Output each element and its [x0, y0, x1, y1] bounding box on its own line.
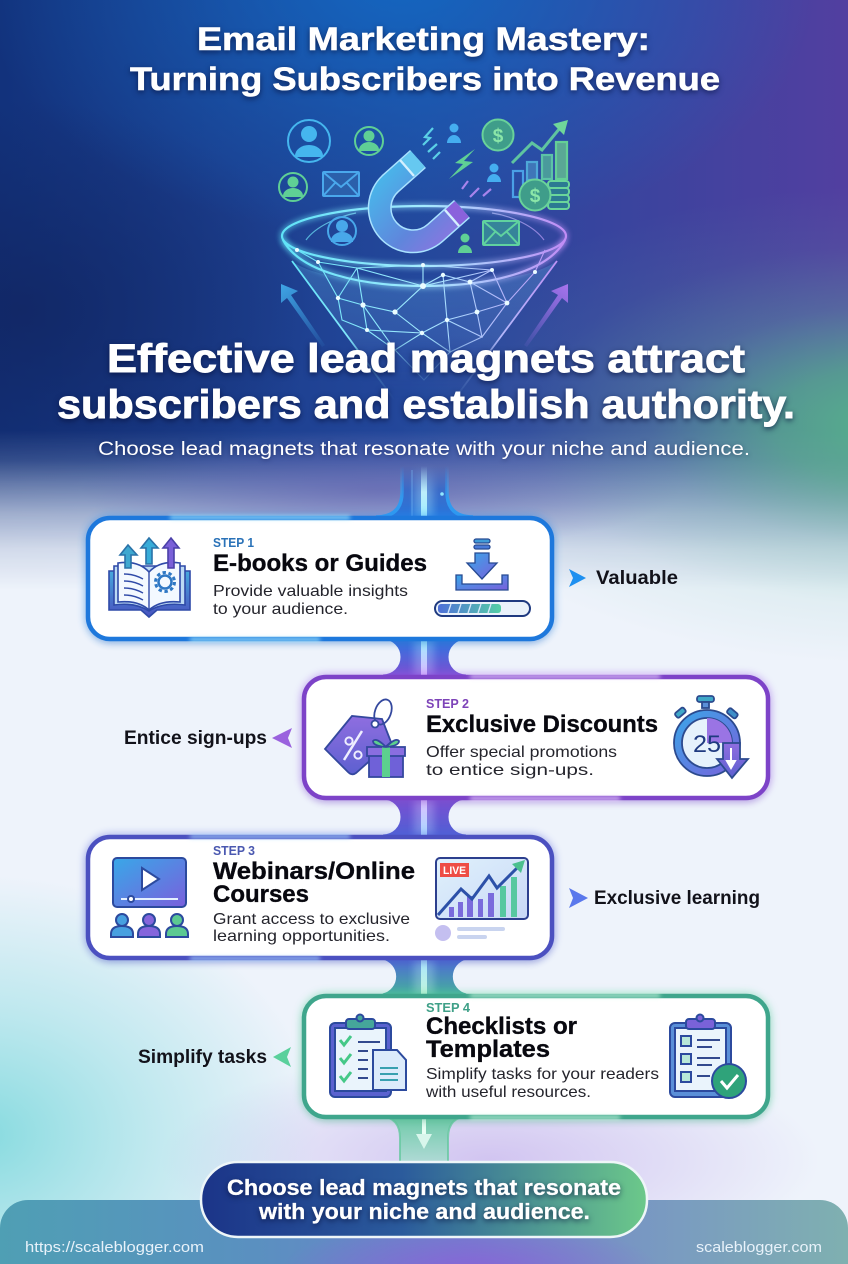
conclusion banner: with your niche and audience.: [258, 1199, 590, 1224]
hero illustration: funnel with magnet and icons: [276, 118, 571, 393]
panel: step 2: [304, 675, 768, 802]
connector to conclusion with arrow: [378, 1116, 470, 1162]
title: Turning Subscribers into Revenue: [130, 61, 720, 97]
card description: Grant access to exclusive: [213, 911, 410, 928]
icon: discount tag with gift: [325, 697, 405, 777]
icon: video lesson with attendees: [111, 858, 188, 937]
step label: STEP 4: [426, 1001, 470, 1015]
icon: dollar coins and growth chart: $: [493, 126, 504, 147]
subheading: Choose lead magnets that resonate with your niche and audience.: [98, 439, 750, 460]
card description: [426, 744, 617, 779]
panel: step 1: [88, 516, 552, 643]
icon: live chart: LIVE: [443, 865, 466, 877]
icon: stopwatch: 25: [693, 731, 721, 758]
card description: [213, 911, 410, 945]
callout: valuable: Valuable: [596, 568, 678, 589]
card description: [425, 1066, 659, 1101]
arrow: right rising: [524, 284, 568, 347]
icon: dollar coins and growth chart: [482, 120, 569, 210]
card description: with useful resources.: [425, 1084, 591, 1101]
card description: to entice sign-ups.: [426, 762, 594, 779]
card title: Webinars/Online: [213, 858, 415, 885]
footer left url: https://scaleblogger.com: [25, 1239, 204, 1256]
step label: STEP 3: [213, 844, 255, 858]
icon: open book with arrows: [109, 538, 190, 617]
icon: stopwatch: [674, 696, 748, 778]
callout: entice sign-ups: Entice sign-ups: [124, 728, 267, 749]
arrow: left rising: [281, 284, 325, 347]
card title: E-books or Guides: [213, 550, 427, 577]
icon: clipboard with document: [330, 1014, 406, 1097]
conclusion banner: Choose lead magnets that resonate: [227, 1175, 621, 1200]
card description: Provide valuable insights: [213, 583, 408, 600]
card description: to your audience.: [213, 601, 348, 618]
main heading: Effective lead magnets attract: [107, 337, 745, 381]
icon: clipboard with check badge: [670, 1014, 746, 1098]
panel: step 4: [304, 994, 768, 1121]
card title: Checklists or: [426, 1013, 577, 1040]
magnet: [380, 159, 462, 241]
conclusion banner: [201, 1162, 647, 1237]
main heading: subscribers and establish authority.: [57, 383, 795, 427]
icon: small persons and bolts: [423, 124, 501, 253]
footer band: [0, 1200, 848, 1264]
card description: learning opportunities.: [213, 928, 390, 945]
callout: simplify tasks: Simplify tasks: [138, 1047, 267, 1068]
panel: step 3: Courses: [213, 881, 309, 908]
central connector spine: [376, 466, 473, 995]
icon: envelopes: [323, 172, 519, 245]
card description: Offer special promotions: [426, 744, 617, 761]
main heading: [57, 337, 795, 427]
icon: subscriber circles: [279, 120, 383, 245]
footer right url: scaleblogger.com: [696, 1239, 822, 1256]
card description: [213, 583, 408, 618]
icon: dollar coins and growth chart: $: [530, 186, 541, 207]
title: [130, 21, 720, 97]
callout: exclusive learning: Exclusive learning: [594, 888, 760, 909]
panel: step 3: [88, 835, 552, 962]
step label: STEP 2: [426, 697, 469, 711]
icon: live chart: [435, 858, 528, 941]
card description: Simplify tasks for your readers: [426, 1066, 659, 1083]
title: Email Marketing Mastery:: [197, 21, 650, 57]
step label: STEP 1: [213, 536, 254, 550]
funnel mesh: [276, 200, 571, 393]
icon: download with progress bar: [435, 539, 530, 616]
card title: Exclusive Discounts: [426, 711, 658, 738]
panel: step 4: Templates: [426, 1036, 550, 1063]
